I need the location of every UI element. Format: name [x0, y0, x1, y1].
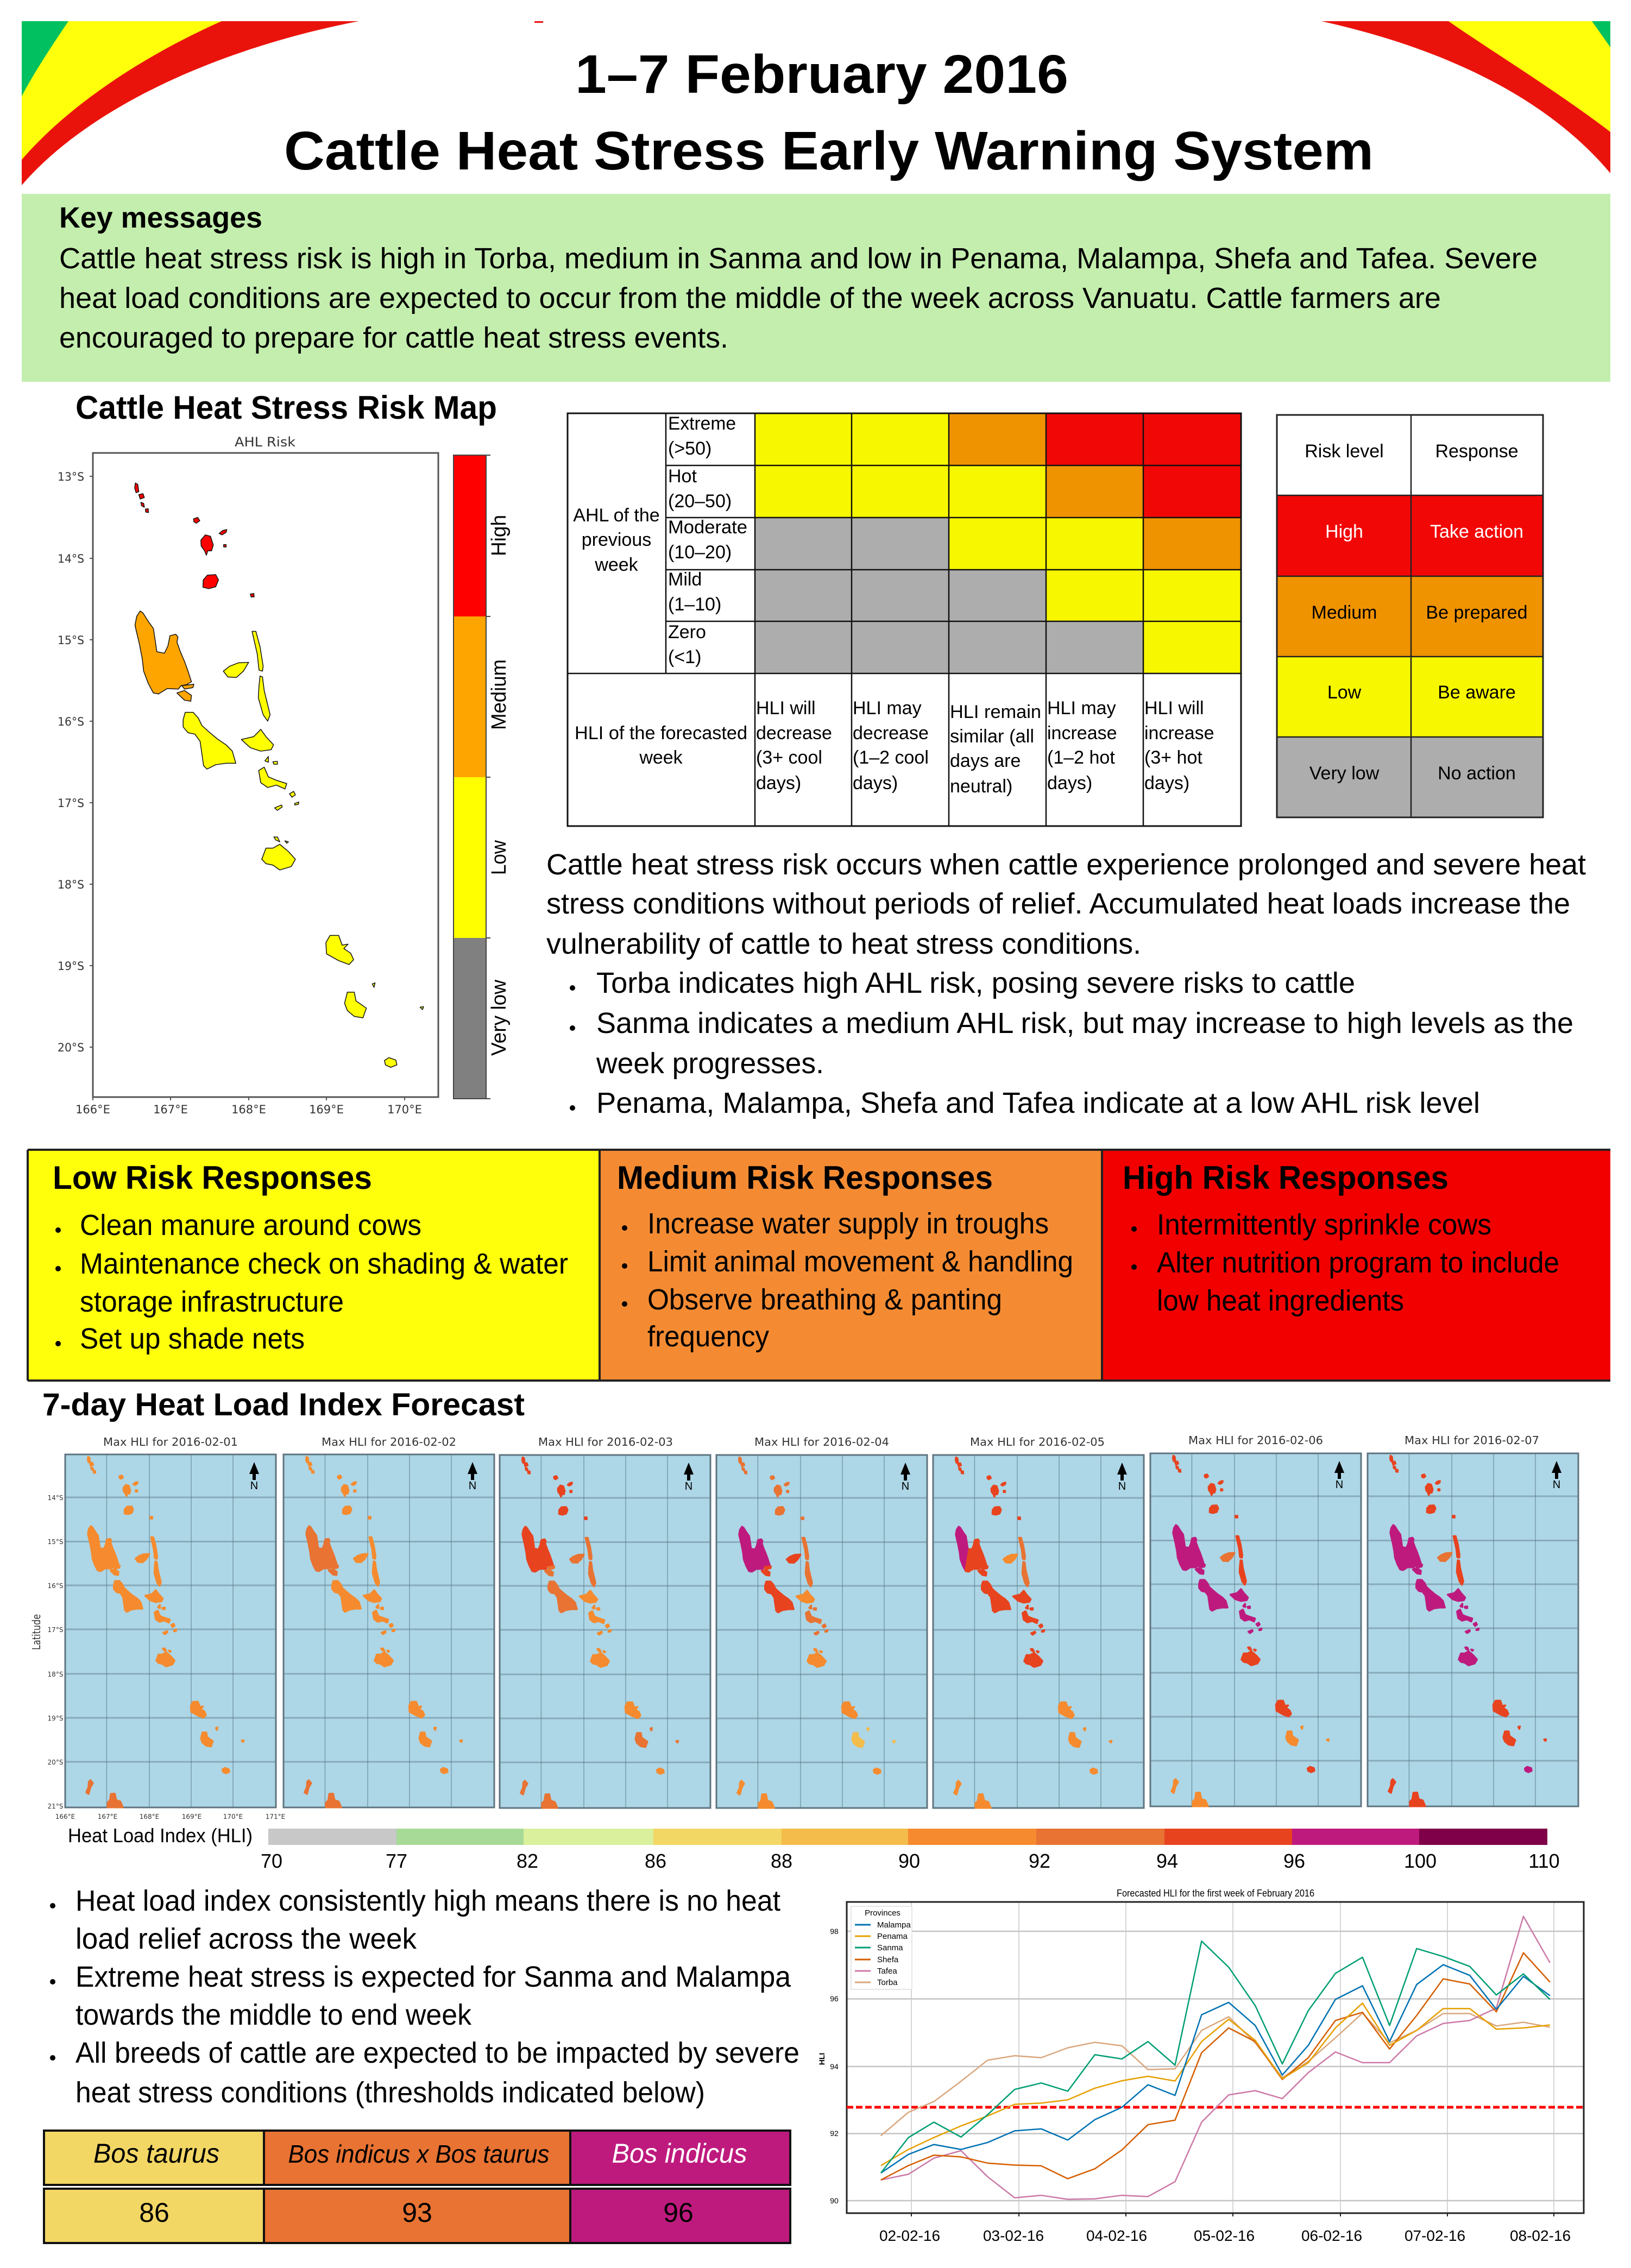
- low risk responses: Clean manure around cows: [80, 1209, 421, 1242]
- table: breed thresholds: [44, 2131, 790, 2243]
- matrix column labels: HLI may: [1047, 698, 1116, 719]
- matrix column labels: increase: [1144, 723, 1214, 744]
- map axis labels: latitude: Latitude: [30, 1614, 43, 1650]
- matrix column labels: HLI remain: [950, 702, 1041, 722]
- map: max HLI 2016-02-03: [500, 1435, 710, 1808]
- map: max HLI 2016-02-04: N: [902, 1480, 909, 1492]
- chart axis labels: 02-02-16: [879, 2227, 940, 2244]
- title: Cattle Heat Stress Early Warning System: [284, 121, 1374, 181]
- matrix column labels: increase: [1047, 723, 1117, 744]
- high risk responses: Intermittently sprinkle cows: [1157, 1208, 1491, 1241]
- matrix column labels: [575, 698, 1214, 797]
- legend: heat load index scale: 92: [1029, 1850, 1050, 1872]
- map axis labels: 19°S: [58, 960, 84, 973]
- matrix column labels: HLI will: [756, 698, 816, 719]
- map: max HLI 2016-02-06: [1150, 1434, 1361, 1806]
- legend: heat load index scale: 82: [517, 1850, 538, 1872]
- map: max HLI 2016-02-03: N: [685, 1480, 692, 1492]
- map axis labels: latitude: 171°E: [266, 1813, 285, 1820]
- table: risk level and response: High: [1325, 521, 1363, 542]
- matrix column labels: days): [853, 773, 898, 793]
- text block: risk explanation: Cattle heat stress risk occurs when cattle experience prolonged and severe heat: [546, 848, 1586, 881]
- legend: heat load index scale: 77: [386, 1850, 407, 1872]
- matrix row labels: Hot: [668, 466, 697, 487]
- map axis labels: 168°E: [231, 1103, 266, 1116]
- matrix row labels: (1–10): [668, 594, 721, 615]
- matrix row labels: Zero: [668, 622, 706, 642]
- matrix column labels: HLI will: [1144, 698, 1204, 719]
- legend: heat load index scale: 88: [771, 1850, 792, 1872]
- text block: HLI bullets: load relief across the week: [75, 1923, 417, 1955]
- medium risk responses: Limit animal movement & handling: [647, 1245, 1073, 1278]
- high risk responses: low heat ingredients: [1157, 1284, 1404, 1317]
- heading: 7-day forecast: 7-day Heat Load Index Forecast: [42, 1387, 525, 1422]
- legend: heat load index scale: 94: [1156, 1850, 1178, 1872]
- heading: key messages: Key messages: [59, 201, 262, 234]
- legend: risk colour bar: Very low: [488, 979, 511, 1056]
- chart axis labels: 92: [830, 2129, 839, 2138]
- chart axis labels: [817, 1927, 1571, 2244]
- chart legend: Tafea: [877, 1967, 897, 1976]
- table: risk level and response: Be prepared: [1426, 602, 1528, 623]
- matrix column labels: (3+ cool: [756, 747, 822, 768]
- map axis labels: 170°E: [387, 1103, 422, 1116]
- map: max HLI 2016-02-01: [65, 1435, 276, 1807]
- high risk responses: [1123, 1160, 1559, 1317]
- map: max HLI 2016-02-01: Max HLI for 2016-02-01: [103, 1435, 238, 1448]
- legend: heat load index scale: 100: [1404, 1850, 1437, 1872]
- low risk responses: Set up shade nets: [80, 1322, 305, 1355]
- matrix row labels: (<1): [668, 647, 701, 667]
- matrix row labels: AHL of the: [573, 505, 660, 526]
- table: breed thresholds: Bos taurus: [93, 2138, 219, 2169]
- map: max HLI 2016-02-06: N: [1336, 1479, 1343, 1491]
- map axis labels: 18°S: [58, 878, 84, 891]
- text block: risk explanation: Torba indicates high AHL risk, posing severe risks to cattle: [596, 967, 1355, 999]
- map axis labels: latitude: 19°S: [48, 1715, 63, 1722]
- matrix row labels: (10–20): [668, 542, 732, 563]
- matrix column labels: decrease: [756, 723, 832, 744]
- matrix column labels: days): [1144, 773, 1189, 793]
- map axis labels: 17°S: [58, 797, 84, 810]
- table: risk level and response: Take action: [1430, 521, 1523, 542]
- text block: risk explanation: vulnerability of cattle to heat stress conditions.: [546, 928, 1141, 960]
- matrix column labels: HLI of the forecasted: [575, 723, 747, 744]
- chart axis labels: 98: [830, 1927, 839, 1936]
- matrix column labels: (3+ hot: [1144, 747, 1202, 768]
- text block: key messages body: [59, 242, 1538, 354]
- legend: risk colour bar: High: [488, 515, 511, 556]
- map axis labels: latitude: 166°E: [55, 1813, 75, 1820]
- matrix row labels: [573, 413, 747, 667]
- legend: heat load index scale: 90: [898, 1850, 920, 1872]
- province lines: [881, 1916, 1550, 2199]
- table: risk level and response: Response: [1435, 441, 1519, 462]
- chart: forecasted HLI line chart: Forecasted HLI for the first week of February 2016: [1117, 1888, 1314, 1899]
- low risk responses: storage infrastructure: [80, 1286, 344, 1318]
- chart legend: Sanma: [877, 1943, 903, 1952]
- text block: HLI bullets: Heat load index consistently high means there is no heat: [75, 1885, 780, 1917]
- map axis labels: 169°E: [309, 1103, 344, 1116]
- matrix row labels: (>50): [668, 438, 711, 459]
- matrix column labels: (1–2 cool: [853, 747, 929, 768]
- text block: HLI bullets: All breeds of cattle are expected to be impacted by severe: [75, 2037, 799, 2069]
- map: max HLI 2016-02-05: [933, 1435, 1144, 1808]
- chart legend: Torba: [877, 1978, 898, 1987]
- matrix row labels: week: [594, 555, 639, 575]
- chart: forecasted HLI line chart: [817, 1888, 1584, 2244]
- table: risk level and response: Low: [1327, 682, 1362, 703]
- map axis labels: latitude: 169°E: [182, 1813, 201, 1820]
- matrix column labels: days): [1047, 773, 1092, 793]
- map axis labels: [58, 470, 422, 1116]
- legend: heat load index scale: 110: [1528, 1850, 1560, 1872]
- chart axis labels: 90: [830, 2196, 839, 2205]
- map axis labels: latitude: 18°S: [48, 1671, 63, 1678]
- legend: heat load index scale: 96: [1283, 1850, 1305, 1872]
- chart axis labels: 08-02-16: [1510, 2227, 1571, 2244]
- map: max HLI 2016-02-02: Max HLI for 2016-02-02: [322, 1435, 456, 1448]
- matrix column labels: (1–2 hot: [1047, 747, 1115, 768]
- chart axis labels: 07-02-16: [1405, 2227, 1465, 2244]
- map axis labels: latitude: 15°S: [48, 1538, 63, 1546]
- high risk responses: Alter nutrition program to include: [1157, 1246, 1559, 1279]
- chart axis labels: 96: [830, 1994, 839, 2003]
- legend: heat load index scale: 70: [261, 1850, 282, 1872]
- legend: risk colour bar: [454, 455, 511, 1099]
- chart axis labels: HLI: [817, 2053, 826, 2065]
- matrix row labels: Mild: [668, 569, 702, 590]
- header corner decoration: left: [22, 21, 543, 185]
- map axis labels: latitude: [30, 1494, 285, 1820]
- table: risk level and response: Risk level: [1305, 441, 1384, 462]
- map: max HLI 2016-02-07: N: [1553, 1479, 1560, 1491]
- matrix row labels: (20–50): [668, 491, 732, 512]
- table: risk matrix: [568, 413, 1241, 826]
- text block: key messages body: Cattle heat stress risk is high in Torba, medium in Sanma and low in Penama, Malampa, Shefa and Tafea. Severe: [59, 242, 1538, 275]
- map axis labels: latitude: 20°S: [48, 1759, 63, 1766]
- panel: key messages: [22, 194, 1610, 382]
- map axis labels: 20°S: [58, 1041, 84, 1054]
- text block: risk explanation: week progresses.: [596, 1047, 824, 1080]
- panel: risk responses: [28, 1150, 1610, 1381]
- map axis labels: latitude: 21°S: [48, 1803, 63, 1810]
- map axis labels: latitude: 168°E: [140, 1813, 159, 1820]
- table: risk level and response: No action: [1438, 763, 1516, 784]
- legend: heat load index scale: [68, 1824, 1560, 1872]
- low risk responses: [53, 1160, 568, 1355]
- map: max HLI 2016-02-04: [716, 1435, 927, 1808]
- title: [284, 44, 1374, 181]
- chart: AHL risk map: AHL Risk: [235, 434, 295, 450]
- matrix row labels: Moderate: [668, 517, 747, 538]
- table: risk level and response: Very low: [1309, 763, 1380, 784]
- map axis labels: 167°E: [153, 1103, 188, 1116]
- map: max HLI 2016-02-03: Max HLI for 2016-02-03: [538, 1435, 673, 1448]
- matrix column labels: HLI may: [853, 698, 922, 719]
- text block: HLI bullets: heat stress conditions (thresholds indicated below): [75, 2076, 705, 2109]
- table: breed thresholds: 86: [139, 2197, 169, 2228]
- text block: risk explanation: Penama, Malampa, Shefa and Tafea indicate at a low AHL risk level: [596, 1087, 1480, 1119]
- legend: heat load index scale: Heat Load Index (HLI): [68, 1824, 253, 1847]
- chart: AHL risk map: [58, 434, 438, 1116]
- map axis labels: 14°S: [58, 552, 84, 565]
- map: max HLI 2016-02-07: [1368, 1434, 1578, 1806]
- map islands: [135, 483, 424, 1067]
- matrix column labels: days): [756, 773, 801, 793]
- map: max HLI 2016-02-06: Max HLI for 2016-02-06: [1188, 1434, 1323, 1447]
- map axis labels: latitude: 167°E: [98, 1813, 117, 1820]
- map axis labels: latitude: 16°S: [48, 1582, 63, 1590]
- table: risk level and response: [1277, 415, 1543, 817]
- chart axis labels: 05-02-16: [1194, 2227, 1255, 2244]
- table: breed thresholds: Bos indicus x Bos taurus: [288, 2140, 550, 2168]
- map: max HLI 2016-02-02: [284, 1435, 494, 1807]
- matrix column labels: neutral): [950, 776, 1012, 797]
- legend: heat load index scale: 86: [645, 1850, 666, 1872]
- text block: risk explanation: Sanma indicates a medium AHL risk, but may increase to high levels as the: [596, 1007, 1573, 1040]
- header corner decoration: right: [1321, 21, 1610, 173]
- legend: risk colour bar: Low: [488, 840, 511, 875]
- chart legend: Shefa: [877, 1955, 899, 1964]
- title: 1–7 February 2016: [575, 44, 1068, 105]
- text block: key messages body: heat load conditions are expected to occur from the middle of the week across Vanuatu. Cattle farmers are: [59, 282, 1441, 314]
- table: breed thresholds: 96: [663, 2197, 694, 2228]
- map: max HLI 2016-02-05: N: [1118, 1480, 1126, 1492]
- chart axis labels: 06-02-16: [1301, 2227, 1362, 2244]
- map: max HLI 2016-02-04: Max HLI for 2016-02-04: [754, 1435, 889, 1448]
- low risk responses: Maintenance check on shading & water: [80, 1248, 568, 1280]
- matrix colour cells: [755, 413, 1241, 673]
- text block: HLI bullets: towards the middle to end week: [75, 1999, 472, 2031]
- map axis labels: 16°S: [58, 715, 84, 728]
- text block: risk explanation: stress conditions without periods of relief. Accumulated heat loads increase the: [546, 887, 1570, 920]
- map axis labels: 15°S: [58, 634, 84, 647]
- medium risk responses: Observe breathing & panting: [647, 1283, 1002, 1316]
- medium risk responses: Medium Risk Responses: [617, 1160, 993, 1196]
- matrix column labels: week: [639, 747, 683, 768]
- high risk responses: High Risk Responses: [1123, 1160, 1449, 1196]
- text block: key messages body: encouraged to prepare for cattle heat stress events.: [59, 322, 728, 354]
- matrix column labels: days are: [950, 751, 1021, 771]
- chart axis labels: 94: [830, 2062, 839, 2071]
- heat threshold line: [847, 2106, 1584, 2108]
- medium risk responses: [617, 1160, 1073, 1353]
- chart axis labels: 04-02-16: [1086, 2227, 1147, 2244]
- chart legend: Penama: [877, 1932, 908, 1941]
- table: risk level and response: Medium: [1312, 602, 1377, 623]
- text block: HLI bullets: Extreme heat stress is expected for Sanma and Malampa: [75, 1961, 791, 1993]
- map: max HLI 2016-02-07: Max HLI for 2016-02-07: [1405, 1434, 1539, 1447]
- text block: HLI bullets: [50, 1885, 799, 2109]
- table: risk level and response: Be aware: [1438, 682, 1516, 703]
- map axis labels: latitude: 14°S: [48, 1494, 63, 1502]
- matrix column labels: decrease: [853, 723, 929, 744]
- chart legend: Malampa: [877, 1920, 911, 1930]
- heading: risk map: Cattle Heat Stress Risk Map: [75, 389, 497, 426]
- matrix row labels: previous: [582, 530, 651, 550]
- chart legend: [851, 1906, 912, 1989]
- map axis labels: latitude: 170°E: [223, 1813, 243, 1820]
- map axis labels: 166°E: [75, 1103, 110, 1116]
- table: breed thresholds: Bos indicus: [612, 2138, 747, 2169]
- map: max HLI 2016-02-05: Max HLI for 2016-02-05: [970, 1435, 1105, 1448]
- map: max HLI 2016-02-01: N: [250, 1480, 258, 1492]
- map axis labels: latitude: 17°S: [48, 1626, 63, 1634]
- low risk responses: Low Risk Responses: [53, 1160, 372, 1196]
- medium risk responses: Increase water supply in troughs: [647, 1207, 1049, 1240]
- chart axis labels: 03-02-16: [983, 2227, 1044, 2244]
- text block: risk explanation: [546, 848, 1586, 1119]
- matrix column labels: similar (all: [950, 726, 1034, 747]
- table: breed thresholds: 93: [402, 2197, 432, 2228]
- chart legend: Provinces: [865, 1908, 900, 1918]
- legend: risk colour bar: Medium: [488, 659, 511, 730]
- medium risk responses: frequency: [647, 1320, 769, 1353]
- matrix row labels: Extreme: [668, 413, 736, 434]
- map axis labels: 13°S: [58, 470, 84, 483]
- map: max HLI 2016-02-02: N: [469, 1480, 476, 1492]
